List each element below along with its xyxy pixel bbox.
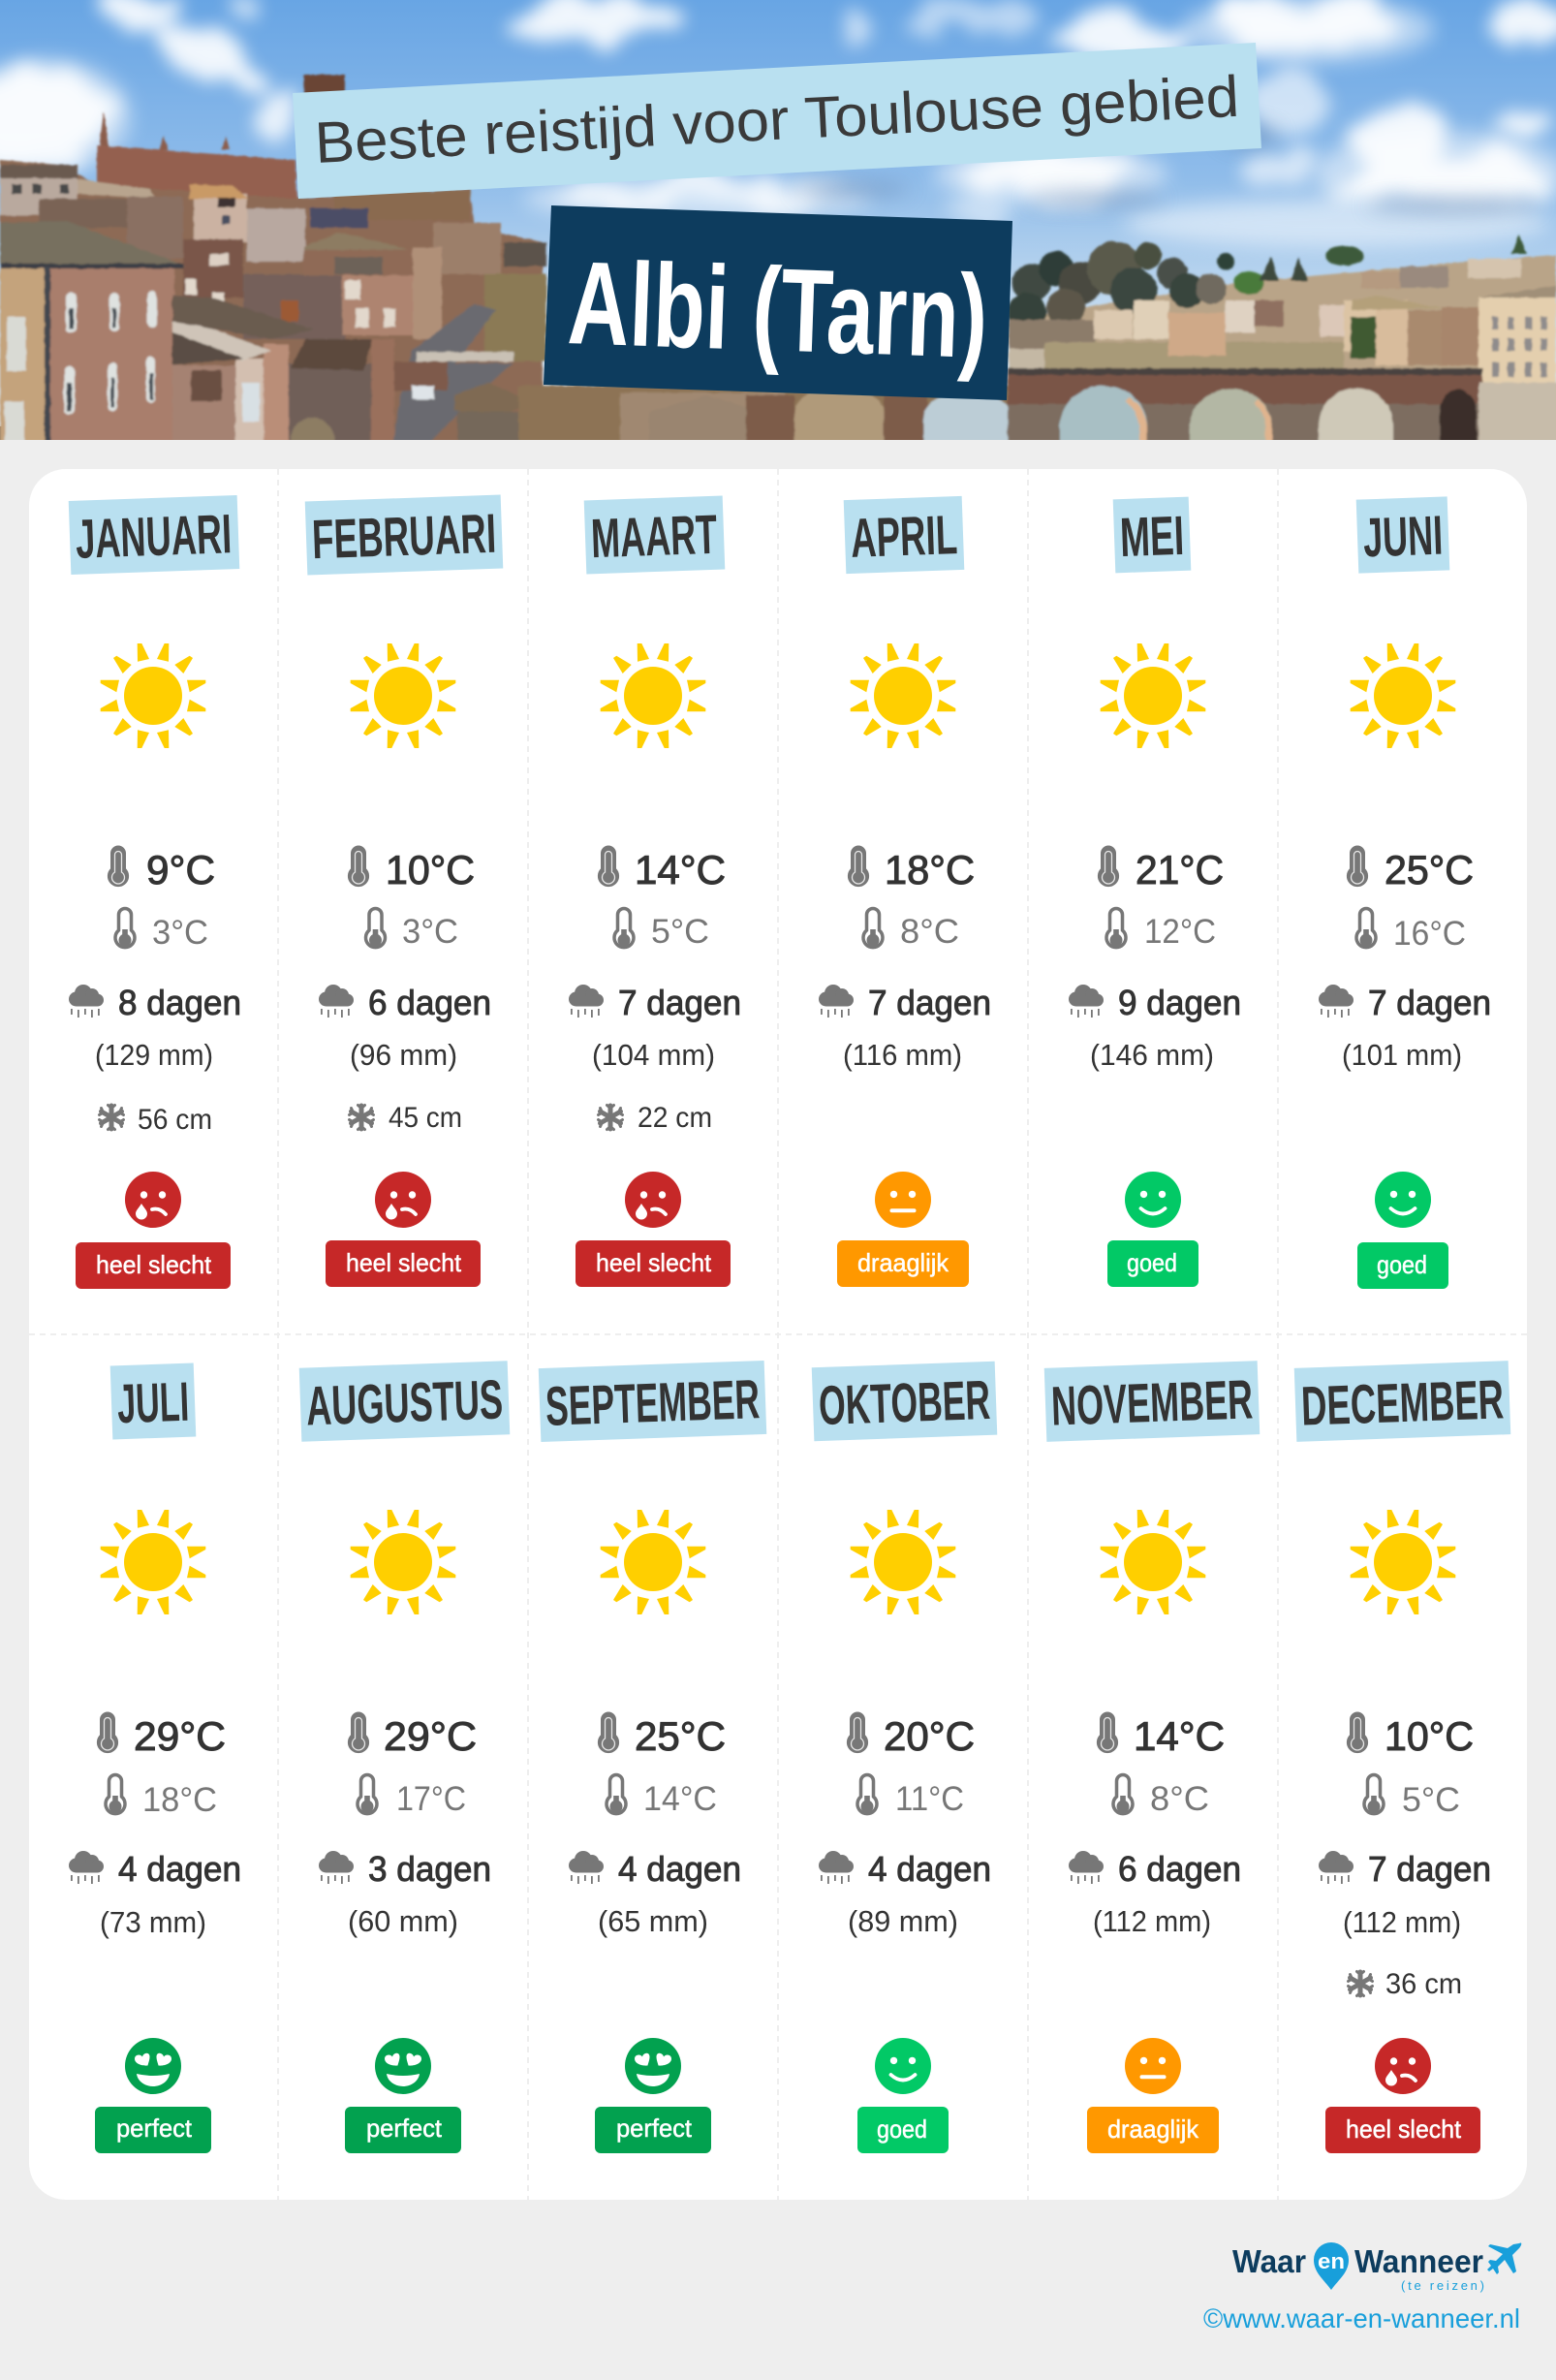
min temperature: 16°C [1393, 915, 1466, 953]
max temperature: 21°C [1136, 847, 1224, 892]
panel: december [1294, 1361, 1510, 2153]
max temperature [349, 847, 475, 892]
snow [599, 1102, 712, 1134]
heading: mei: MEI [1119, 505, 1185, 569]
min temperature [1106, 909, 1216, 951]
panel: februari [305, 494, 503, 1287]
icon: crying face [125, 1172, 181, 1228]
rainfall: (96 mm) [350, 1038, 457, 1072]
rating badge [76, 1242, 231, 1289]
rating badge [345, 2107, 461, 2153]
logo: Waar en Wanneer: Waar [1232, 2243, 1306, 2279]
rain days: 7 dagen [618, 983, 741, 1022]
max temperature [1348, 847, 1474, 892]
rainfall: (101 mm) [1342, 1038, 1462, 1072]
max temperature [109, 847, 215, 892]
rating badge [595, 2107, 711, 2153]
rain days: 9 dagen [1118, 983, 1241, 1022]
heading: januari [69, 495, 239, 575]
footer background strip below photo [0, 440, 1556, 469]
rating badge: heel slecht [96, 1250, 212, 1279]
rain days: 6 dagen [1118, 1849, 1241, 1889]
rating badge: heel slecht [596, 1248, 712, 1277]
panel: juli [69, 1363, 241, 2153]
rating badge [1087, 2107, 1219, 2153]
icon: heart-eyes face [375, 2038, 431, 2094]
min temperature [358, 1775, 466, 1818]
rating badge: goed [1377, 1250, 1427, 1279]
heading: juli [110, 1363, 196, 1439]
snow: 45 cm [389, 1102, 462, 1134]
min temperature [366, 909, 458, 951]
min temperature [857, 1775, 964, 1818]
rain days: 6 dagen [368, 983, 491, 1022]
max temperature: 18°C [885, 847, 975, 892]
max temperature: 10°C [1385, 1713, 1474, 1759]
heading: mei [1113, 497, 1191, 573]
panel: januari [69, 495, 241, 1289]
icon: smiling face [1125, 1172, 1181, 1228]
icon: sun [1351, 643, 1455, 748]
min temperature: 8°C [900, 913, 959, 951]
icon: neutral face [1125, 2038, 1181, 2094]
icon: sun [101, 643, 205, 748]
icon: sun [1351, 1510, 1455, 1614]
rain days: 4 dagen [118, 1849, 241, 1889]
rainfall: (89 mm) [848, 1904, 958, 1938]
panel: juni [1319, 496, 1491, 1289]
icon: sun [1101, 1510, 1205, 1614]
icon: sun [601, 643, 705, 748]
website url: ©www.waar-en-wanneer.nl [1203, 2303, 1520, 2333]
title banner [293, 43, 1261, 199]
rainfall: (65 mm) [598, 1904, 708, 1938]
logo: Waar en Wanneer: Wanneer [1354, 2243, 1483, 2279]
rating badge: heel slecht [1346, 2114, 1462, 2144]
heading: januari: JANUARI [75, 503, 233, 571]
heading: maart: MAART [590, 504, 718, 570]
rating badge [1357, 1242, 1448, 1289]
heading: juni [1356, 496, 1449, 574]
rating badge: draaglijk [857, 1248, 949, 1277]
rating badge: perfect [366, 2114, 443, 2143]
heading: september: SEPTEMBER [545, 1368, 761, 1438]
min temperature: 8°C [1150, 1780, 1209, 1818]
header photo: Albi skyline [0, 0, 1556, 446]
heading: oktober [812, 1362, 997, 1441]
panel: oktober [812, 1362, 997, 2153]
rain days: 8 dagen [118, 983, 241, 1022]
max temperature: 29°C [134, 1713, 226, 1759]
panel: maart [569, 496, 741, 1287]
min temperature: 3°C [152, 914, 208, 952]
title banner: Beste reistijd voor Toulouse gebied [313, 64, 1240, 175]
max temperature: 29°C [384, 1713, 477, 1759]
icon: map pin: en [1318, 2249, 1345, 2273]
max temperature: 10°C [386, 847, 475, 892]
right town [1009, 255, 1556, 373]
rating badge [326, 1240, 481, 1287]
snow: 56 cm [138, 1104, 212, 1136]
heading: oktober: OKTOBER [818, 1369, 991, 1437]
rain days: 4 dagen [868, 1849, 991, 1889]
min temperature [863, 909, 959, 951]
location banner [544, 205, 1012, 400]
rainfall: (116 mm) [843, 1038, 962, 1072]
icon: crying face [1375, 2038, 1431, 2094]
rain days: 4 dagen [618, 1849, 741, 1889]
left town [304, 75, 345, 98]
heading: maart [584, 496, 725, 574]
rain days: 7 dagen [868, 983, 991, 1022]
min temperature [607, 1775, 717, 1818]
max temperature: 20°C [884, 1713, 975, 1759]
icon: sun [851, 643, 955, 748]
rating badge [857, 2107, 949, 2153]
panel: mei [1069, 497, 1241, 1287]
heading: augustus: AUGUSTUS [305, 1368, 504, 1438]
icon: sun [851, 1510, 955, 1614]
heading: juni: JUNI [1362, 505, 1444, 569]
rainfall: (112 mm) [1343, 1905, 1461, 1939]
heading: augustus [299, 1361, 510, 1442]
icon: sun [351, 1510, 455, 1614]
max temperature: 25°C [635, 1713, 726, 1759]
logo: Waar en Wanneer [1232, 2242, 1521, 2293]
icon: sun [601, 1510, 705, 1614]
rain days: 7 dagen [1368, 1849, 1491, 1889]
heading: september [539, 1361, 766, 1442]
icon: airplane [1487, 2243, 1521, 2274]
min temperature: 14°C [643, 1780, 717, 1818]
max temperature: 14°C [635, 847, 726, 892]
icon: smiling face [875, 2038, 931, 2094]
rating badge: draaglijk [1107, 2114, 1199, 2144]
heading: februari [305, 494, 503, 576]
rainfall: (146 mm) [1090, 1038, 1214, 1072]
icon: heart-eyes face [125, 2038, 181, 2094]
panel: april [819, 496, 991, 1287]
rain days: 7 dagen [1368, 983, 1491, 1022]
rating badge [576, 1240, 731, 1287]
rating badge [95, 2107, 211, 2153]
min temperature: 5°C [1402, 1781, 1460, 1819]
rain days: 3 dagen [368, 1849, 491, 1889]
snow [99, 1104, 212, 1136]
max temperature [1099, 847, 1224, 892]
min temperature [1113, 1775, 1209, 1818]
icon: sun [351, 643, 455, 748]
rating badge: goed [877, 2114, 927, 2144]
snow [349, 1102, 462, 1134]
rainfall: (73 mm) [100, 1905, 206, 1939]
max temperature: 9°C [146, 847, 215, 892]
snow [1349, 1968, 1462, 2000]
icon: crying face [375, 1172, 431, 1228]
min temperature: 5°C [651, 913, 709, 951]
panel: white calendar card [29, 469, 1527, 2200]
icon: heart-eyes face [625, 2038, 681, 2094]
rating badge: heel slecht [346, 1248, 462, 1277]
heading: november [1044, 1361, 1260, 1442]
max temperature: 14°C [1134, 1713, 1225, 1759]
heading: april [844, 496, 964, 574]
max temperature [1348, 1713, 1474, 1759]
snow: 22 cm [638, 1102, 712, 1134]
icon: sun [101, 1510, 205, 1614]
location banner: Albi (Tarn) [566, 236, 990, 383]
min temperature: 17°C [396, 1780, 466, 1818]
rating badge: perfect [616, 2114, 693, 2143]
rating badge [1325, 2107, 1480, 2153]
icon: map pin [1314, 2242, 1349, 2290]
rating badge [1107, 1240, 1198, 1287]
rainfall: (129 mm) [95, 1038, 213, 1072]
icon: neutral face [875, 1172, 931, 1228]
heading: november: NOVEMBER [1050, 1368, 1254, 1438]
below navy banner [518, 386, 1017, 446]
rainfall: (60 mm) [348, 1904, 458, 1938]
min temperature [106, 1775, 217, 1819]
min temperature: 12°C [1144, 913, 1216, 951]
heading: juli: JULI [116, 1371, 190, 1435]
min temperature [614, 909, 709, 951]
min temperature: 11°C [895, 1780, 964, 1818]
icon: sun [1101, 643, 1205, 748]
heading: april: APRIL [850, 504, 958, 570]
rating badge [837, 1240, 969, 1287]
panel: augustus [299, 1361, 510, 2153]
rating badge: goed [1127, 1248, 1177, 1277]
min temperature [115, 909, 208, 952]
rainfall: (104 mm) [592, 1038, 715, 1072]
icon: smiling face [1375, 1172, 1431, 1228]
panel: september [539, 1361, 766, 2153]
snow: 36 cm [1385, 1968, 1462, 2000]
min temperature: 18°C [142, 1781, 217, 1819]
heading: februari: FEBRUARI [311, 503, 497, 571]
min temperature [1364, 1775, 1460, 1819]
icon: crying face [625, 1172, 681, 1228]
logo: Waar en Wanneer: (te reizen) [1401, 2278, 1484, 2293]
rainfall: (112 mm) [1093, 1904, 1211, 1938]
panel: november [1044, 1361, 1260, 2153]
rating badge: perfect [116, 2114, 193, 2143]
max temperature: 25°C [1385, 847, 1474, 892]
min temperature: 3°C [402, 913, 458, 951]
min temperature [1356, 909, 1466, 953]
